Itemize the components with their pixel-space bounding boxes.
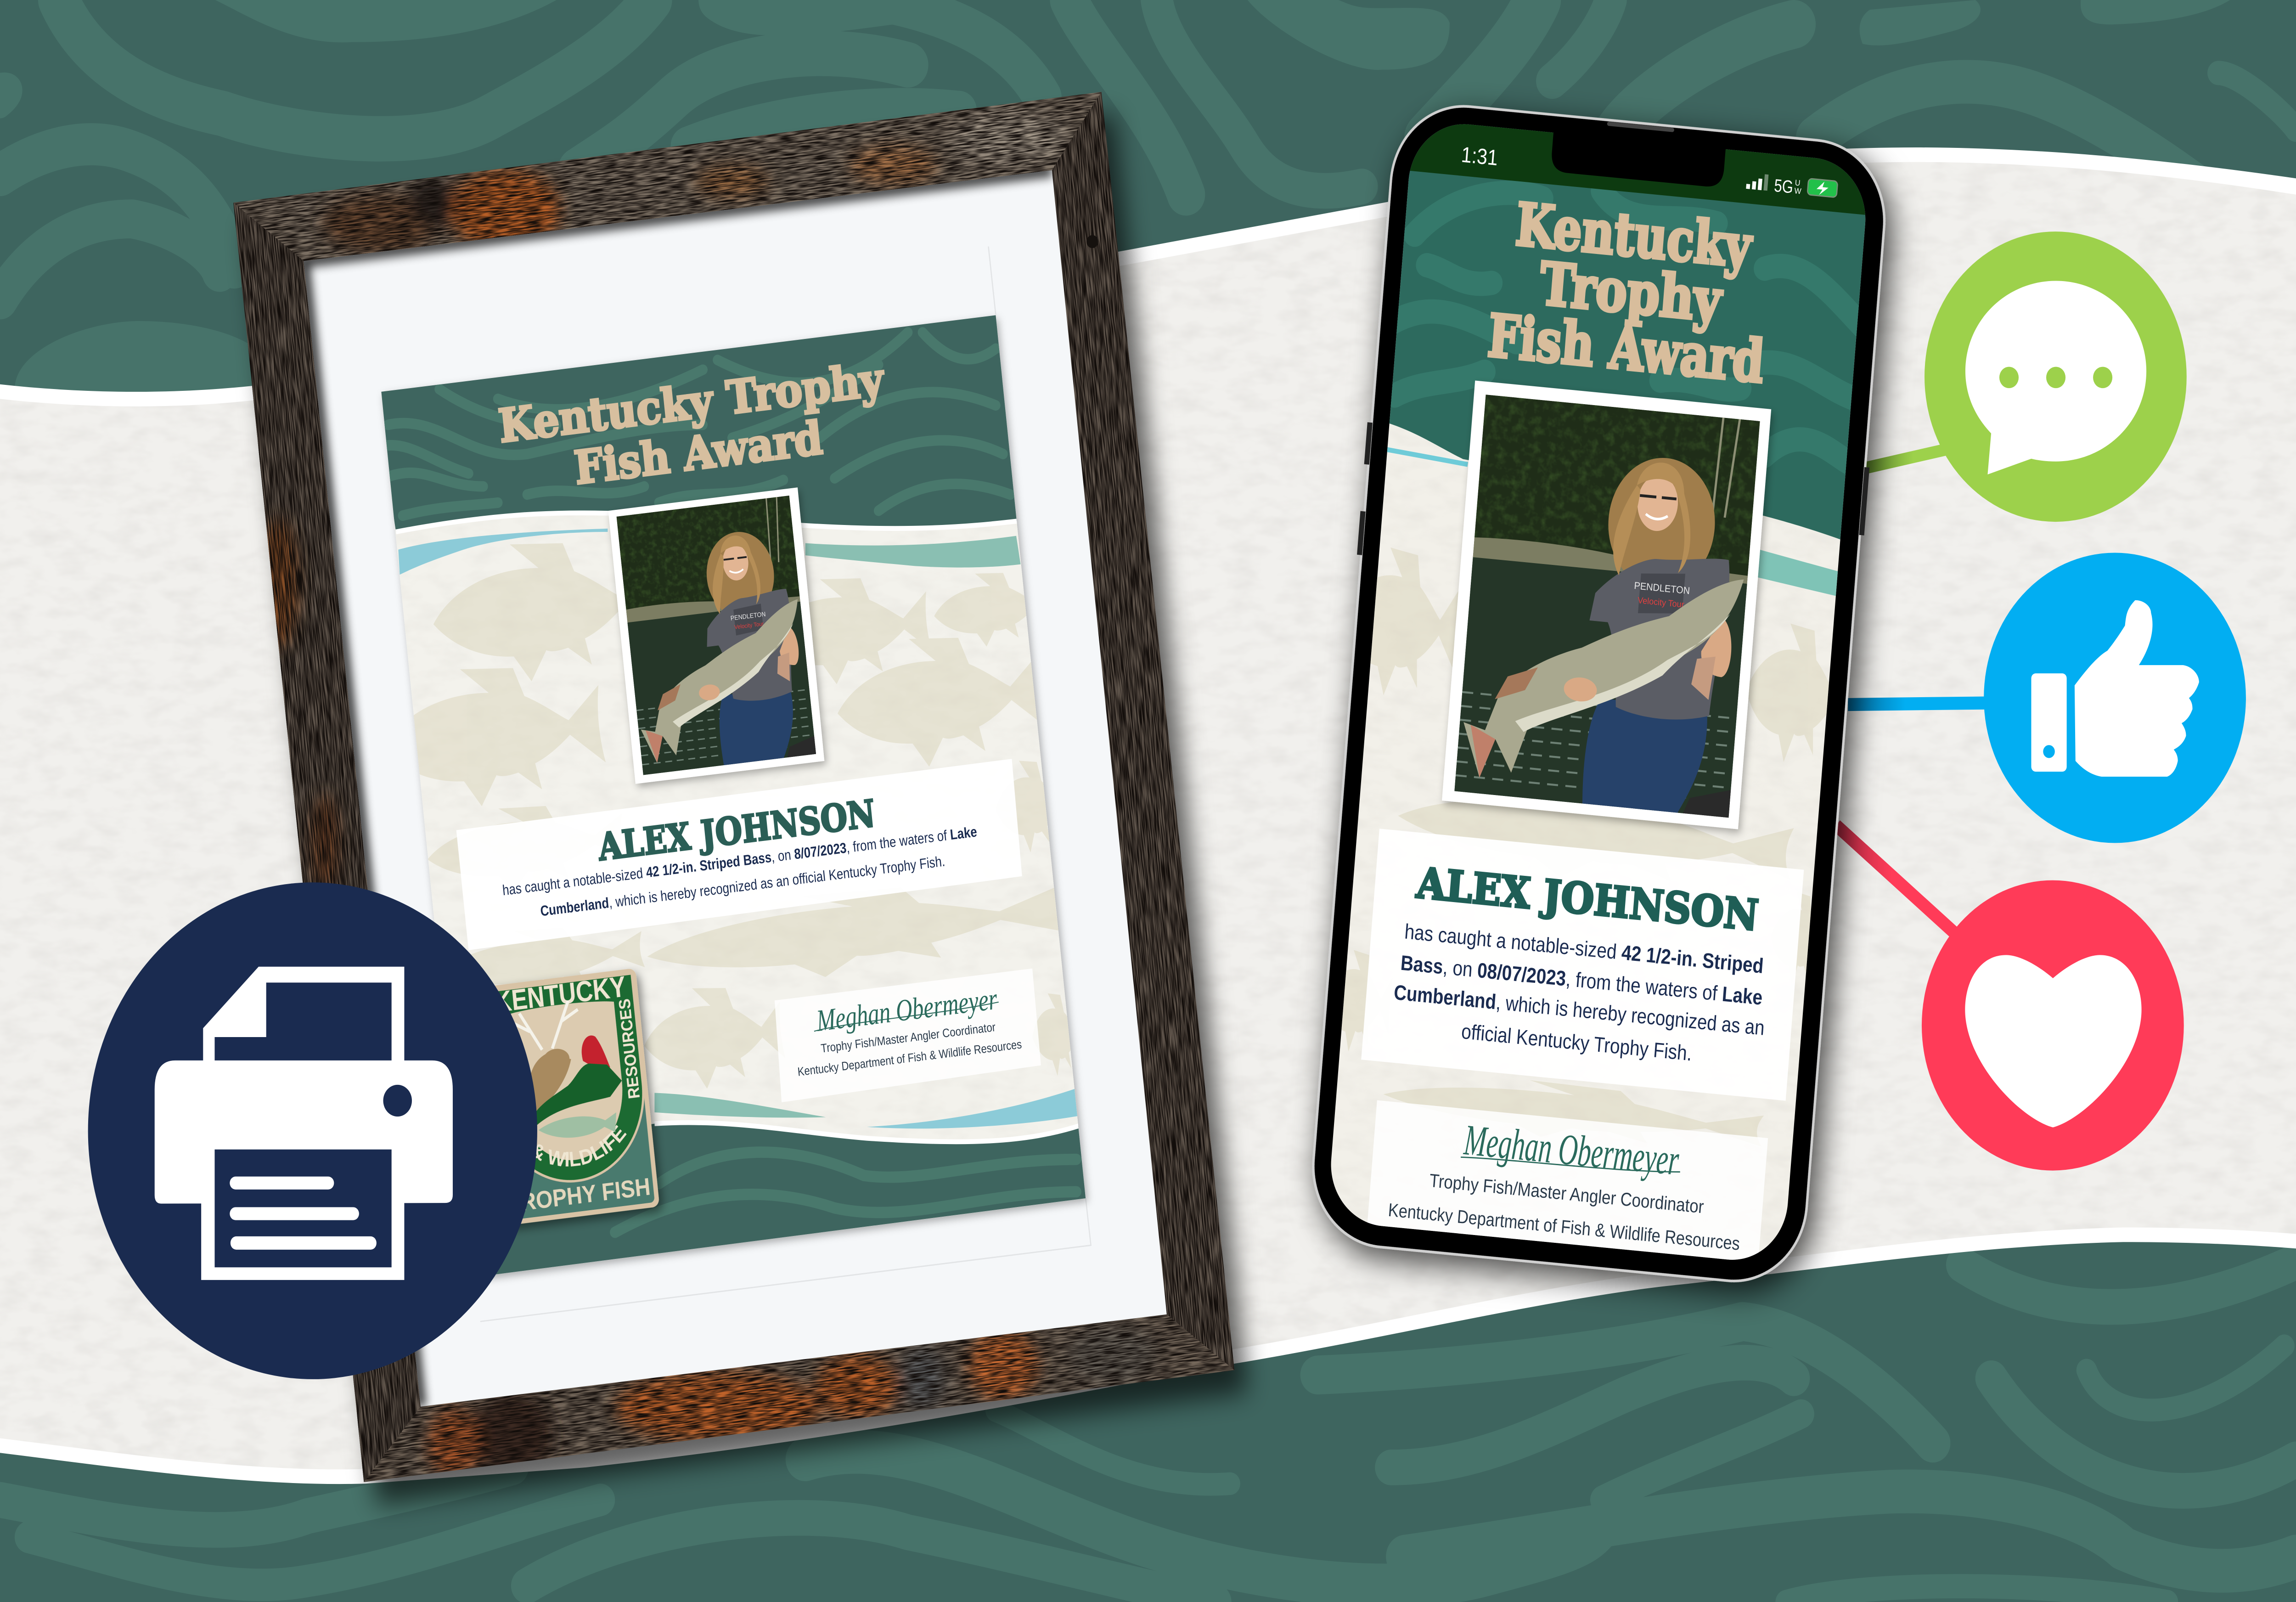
phone achievement text: Cumberland, which is hereby recognized as an (1393, 980, 1766, 1040)
printer status light (383, 1085, 412, 1117)
photo: angler with muskie (616, 496, 816, 775)
certificate paper (381, 315, 1086, 1278)
phone achievement text: Bass, on 08/07/2023, from the waters of Lake (1400, 950, 1763, 1010)
phone signer title: Trophy Fish/Master Angler Coordinator (1429, 1172, 1705, 1218)
achievement text: has caught a notable-sized 42 1/2-in. Striped Bass, on 8/07/2023, from the waters of Lake (502, 824, 978, 898)
Kentucky Fish and Wildlife trophy fish badge: FISH & WILDLIFE (493, 1091, 634, 1180)
teal stripe (1756, 550, 1852, 599)
achievement text: Cumberland, which is hereby recognized as an official Kentucky Trophy Fish. (540, 853, 945, 919)
phone signature underline (1461, 1151, 1680, 1179)
connector lines to social icons (1836, 449, 1992, 937)
signature and title: Trophy Fish/Master Angler Coordinator (820, 1020, 997, 1056)
phone signature box (1366, 1100, 1768, 1284)
name and achievement box (456, 759, 1022, 950)
paper tray top (203, 967, 404, 1070)
signal bars (1746, 173, 1768, 191)
band swirl pattern (383, 333, 1010, 516)
picture frame with certificate (233, 92, 1262, 1517)
side buttons (1357, 419, 1869, 603)
bottom green band (439, 1123, 1098, 1297)
phone title: Kentucky (1514, 191, 1755, 282)
phone achievement text: has caught a notable-sized 42 1/2-in. Striped (1404, 919, 1765, 978)
page text lines (230, 1177, 377, 1250)
phone photo (1442, 381, 1771, 829)
certificate photo (608, 487, 824, 784)
screen band swirl pattern (1385, 172, 1872, 464)
output page (201, 1150, 404, 1280)
printer body (155, 1060, 453, 1204)
top wave white edge (396, 513, 1017, 532)
frame bar: left (63, 143, 581, 1544)
icon: comment bubble (1925, 231, 2187, 522)
connector: like (1848, 703, 1992, 705)
battery (1807, 179, 1838, 197)
screen watermark fish (1301, 543, 1857, 1163)
notch (1550, 131, 1726, 188)
clock: 1:31 (1460, 142, 1499, 170)
phone title (1486, 189, 1775, 397)
phone title: Trophy (1537, 250, 1725, 336)
smartphone (1291, 98, 1895, 1288)
watermark fish (377, 529, 1087, 1095)
connector: comment (1863, 449, 1947, 468)
frame bar: bottom (252, 1184, 1329, 1602)
teal swoosh (805, 536, 1021, 568)
phone photo border (1442, 381, 1771, 829)
signature box (775, 969, 1041, 1102)
recipient name: ALEX JOHNSON (595, 792, 877, 870)
phone photo image (1454, 395, 1760, 818)
phone screen (1292, 109, 1891, 1273)
Kentucky Fish and Wildlife trophy fish badge: TROPHY FISH (506, 1173, 652, 1218)
speaker (1607, 122, 1674, 132)
frame shadow base (233, 92, 1234, 1482)
blue stripe (1384, 449, 1469, 464)
printer circle (88, 882, 537, 1379)
frame bar: top (233, 92, 1101, 261)
connector: love (1836, 825, 1959, 937)
Kentucky Fish and Wildlife trophy fish badge (478, 968, 660, 1226)
frame bar: right (882, 11, 1402, 1444)
bottom swooshes (654, 1093, 826, 1117)
phone body (1307, 100, 1891, 1288)
phone achievement text (1390, 919, 1770, 1072)
bottom band swirl pattern (615, 1152, 1076, 1232)
top green band (373, 308, 1017, 532)
Kentucky Fish and Wildlife trophy fish badge: KENTUCKY (493, 970, 627, 1019)
phone name box (1361, 829, 1804, 1101)
photo border (608, 487, 824, 784)
printer icon (88, 882, 537, 1379)
mat inner shadow (304, 170, 1052, 1407)
signature and title: Meghan Obermeyer (814, 983, 1000, 1039)
phone title: Fish Award (1486, 302, 1767, 397)
screen green band (1372, 112, 1884, 544)
signature and title (797, 983, 1023, 1079)
faint print sheet outline (480, 247, 1091, 1321)
icon: heart (1922, 880, 2184, 1171)
phone signature: Meghan Obermeyer (1462, 1115, 1681, 1185)
blue swoosh (398, 529, 608, 575)
signature and title: Kentucky Department of Fish & Wildlife Resources (797, 1037, 1023, 1079)
network label suffix: W (1794, 187, 1802, 197)
status bar (1398, 112, 1884, 216)
phone signer department: Kentucky Department of Fish & Wildlife Resources (1387, 1202, 1741, 1255)
network label: 5G (1773, 177, 1794, 198)
phone recipient name: ALEX JOHNSON (1413, 860, 1760, 942)
certificate title: Fish Award (572, 412, 825, 495)
screen paper (1314, 112, 1884, 1273)
white mat (304, 170, 1167, 1407)
Kentucky Fish and Wildlife trophy fish badge: RESOURCES (617, 998, 644, 1100)
certificate title: Kentucky Trophy (496, 352, 887, 453)
phone achievement text: official Kentucky Trophy Fish. (1461, 1019, 1693, 1066)
icon: thumbs up (1984, 553, 2246, 843)
certificate (373, 308, 1098, 1297)
phone screen: U (1795, 179, 1801, 189)
